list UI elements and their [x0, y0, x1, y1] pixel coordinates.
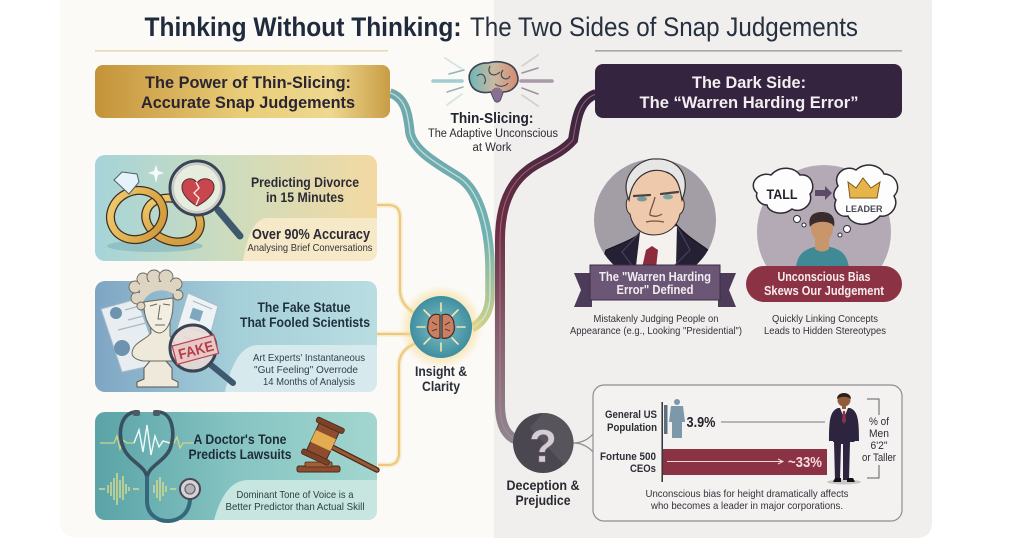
ribbon: warren harding error defined	[574, 265, 736, 307]
text: harding definition	[570, 313, 742, 337]
icon: thought cloud tall	[753, 168, 813, 227]
label: deception and prejudice: Prejudice	[516, 492, 571, 508]
text: predicting divorce: Analysing Brief Conversations	[248, 242, 372, 254]
connector: teal ribbon	[390, 93, 490, 328]
text: doctor's tone: Predicts Lawsuits	[188, 446, 292, 462]
icon: documents	[101, 293, 218, 372]
icon: magnifier with fake stamp: FAKE	[177, 339, 216, 363]
icon: tall man in suit	[827, 393, 861, 484]
right header: dark side: The Dark Side:	[692, 73, 806, 92]
text: doctor's tone: Dominant Tone of Voice is a	[236, 489, 354, 501]
label: percent of men 6'2" or taller: Men	[869, 428, 889, 440]
chart row labels	[600, 409, 657, 475]
right header: dark side	[595, 64, 902, 118]
panel: predicting divorce	[95, 155, 377, 261]
label: insight and clarity	[415, 363, 467, 394]
label: percent of men 6'2" or taller: % of	[869, 416, 890, 428]
label: deception and prejudice	[506, 477, 580, 508]
left header: power of thin-slicing: Accurate Snap Judgements	[141, 93, 355, 112]
text: fake statue: Art Experts' Instantaneous	[253, 352, 365, 364]
label: insight and clarity: Clarity	[422, 378, 460, 394]
central label: thin-slicing: at Work	[472, 142, 512, 154]
illustration: person thinking tall equals leader	[752, 164, 898, 266]
ribbon: warren harding error defined: Error" Defined	[616, 283, 694, 297]
text: bias description	[764, 313, 886, 337]
chart row labels: Fortune 500	[600, 451, 656, 463]
label: percent of men 6'2" or taller	[862, 399, 896, 478]
connector: maroon ribbon	[500, 94, 596, 441]
chart row labels: Population	[607, 422, 657, 434]
icon: sound waves	[99, 425, 194, 505]
central label: thin-slicing: The Adaptive Unconscious	[428, 128, 558, 140]
left header: power of thin-slicing	[95, 65, 390, 118]
icon: thought cloud tall: TALL	[766, 186, 798, 202]
text: doctor's tone: Better Predictor than Actual Skill	[226, 501, 364, 513]
icon: arrow	[815, 186, 832, 200]
bar: fortune 500 CEOs: ~33%	[788, 454, 822, 471]
text: harding definition: Mistakenly Judging People on	[594, 313, 719, 325]
icon: magnifier with broken heart	[170, 161, 240, 236]
label: deception and prejudice: Deception &	[506, 477, 580, 493]
text: bias description: Leads to Hidden Stereotypes	[764, 325, 886, 337]
chart caption: who becomes a leader in major corporations.	[650, 500, 843, 512]
icon: central brain with rays	[433, 55, 552, 106]
icon: deception question mark	[513, 413, 574, 473]
chart row labels: CEOs	[630, 463, 656, 475]
panel: doctor's tone	[95, 410, 377, 521]
text: fake statue: That Fooled Scientists	[240, 314, 370, 330]
text: fake statue: "Gut Feeling" Overrode	[254, 364, 358, 376]
value: 3.9 percent: 3.9%	[686, 414, 716, 431]
icon: thought cloud leader crown	[834, 165, 898, 237]
icon: stethoscope	[120, 410, 200, 521]
central label: thin-slicing: Thin-Slicing:	[450, 110, 534, 127]
icon: marble bust	[129, 270, 183, 387]
central label: thin-slicing	[428, 110, 558, 154]
title	[144, 12, 858, 42]
pill: unconscious bias: Unconscious Bias	[778, 270, 871, 284]
right header: dark side: The “Warren Harding Error”	[640, 93, 858, 112]
ribbon: warren harding error defined: The "Warren Harding	[599, 270, 711, 284]
text: doctor's tone	[188, 431, 364, 513]
panel: height statistics chart	[573, 385, 902, 521]
text: fake statue: The Fake Statue	[258, 299, 351, 315]
label: percent of men 6'2" or taller: or Taller	[862, 452, 896, 464]
text: bias description: Quickly Linking Concepts	[772, 313, 878, 325]
label: percent of men 6'2" or taller: 6'2"	[870, 440, 888, 452]
chart row labels: General US	[605, 409, 657, 421]
icon: gavel	[297, 417, 377, 472]
title: The Two Sides of Snap Judgements	[470, 12, 858, 42]
pill: unconscious bias	[746, 266, 902, 302]
icon: insight circle	[399, 285, 483, 369]
label: insight and clarity: Insight &	[415, 363, 467, 379]
chart caption	[646, 488, 848, 512]
illustration: Warren Harding portrait	[594, 158, 716, 264]
icon: magnifier with fake stamp	[170, 325, 233, 383]
chart caption: Unconscious bias for height dramatically affects	[646, 488, 848, 500]
icon: deception question mark: ?	[529, 420, 557, 472]
pill: unconscious bias: Skews Our Judgement	[764, 284, 885, 298]
text: doctor's tone: A Doctor's Tone	[194, 431, 287, 447]
text: predicting divorce: Over 90% Accuracy	[252, 227, 370, 243]
connectors: gold lines to insight	[377, 205, 416, 465]
left header: power of thin-slicing: The Power of Thin-Slicing:	[145, 73, 351, 92]
text: predicting divorce: in 15 Minutes	[266, 189, 344, 205]
panel: fake statue	[95, 270, 377, 392]
text: predicting divorce	[248, 174, 372, 254]
text: fake statue	[240, 299, 370, 388]
bar: fortune 500 CEOs	[663, 449, 827, 475]
text: harding definition: Appearance (e.g., Looking "Presidential")	[570, 325, 742, 337]
icon: thought cloud leader crown: LEADER	[846, 204, 883, 215]
text: fake statue: 14 Months of Analysis	[263, 376, 355, 388]
text: predicting divorce: Predicting Divorce	[251, 174, 359, 190]
icon: wedding rings and diamond	[102, 165, 206, 249]
small person icon	[664, 399, 685, 438]
title: Thinking Without Thinking:	[144, 12, 462, 42]
